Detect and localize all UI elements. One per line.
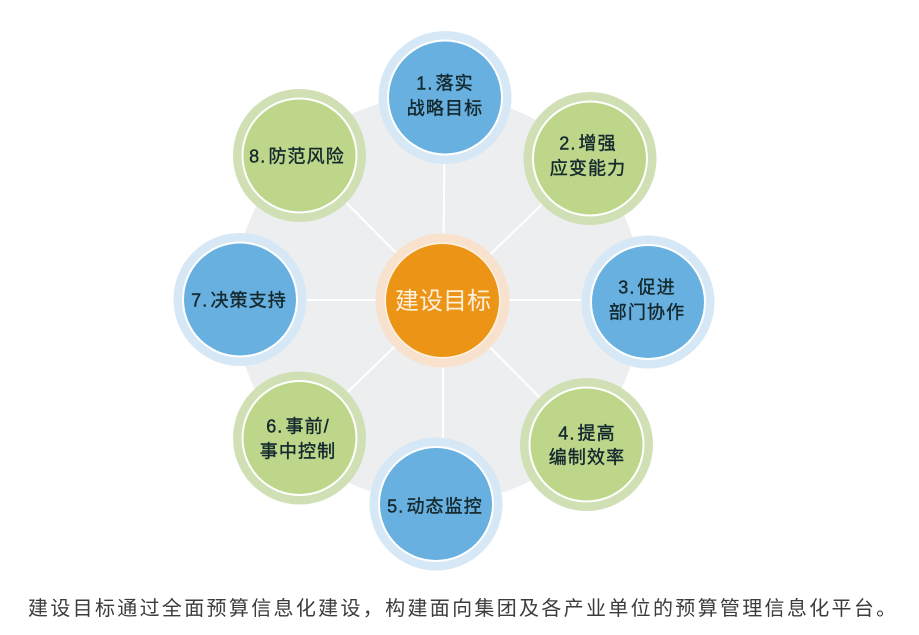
- node 1: 落实战略目标: [378, 31, 512, 164]
- node 6: 事前/事中控制: [233, 372, 366, 504]
- spokes connecting centre to nodes: [240, 97, 648, 504]
- node 1: 落实战略目标: 战略目标: [407, 98, 483, 118]
- background panel: gray disc: [234, 95, 642, 503]
- node 8: 防范风险: 8. 防范风险: [249, 146, 345, 166]
- node 7: 决策支持: 7. 决策支持: [191, 290, 287, 310]
- node 3: 促进部门协作: 部门协作: [609, 302, 685, 322]
- node 6: 事前/事中控制: 事中控制: [260, 442, 336, 462]
- node 5: 动态监控: 5. 动态监控: [387, 496, 483, 516]
- centre node: 建设目标: 建设目标: [395, 288, 491, 315]
- node 8: 防范风险: [233, 89, 366, 222]
- node 7: 决策支持: [174, 233, 306, 366]
- node 2: 增强应变能力: 应变能力: [550, 158, 626, 178]
- caption: 建设目标通过全面预算信息化建设，构建面向集团及各产业单位的预算管理信息化平台。: [28, 597, 898, 620]
- node 3: 促进部门协作: 3. 促进: [618, 278, 676, 298]
- node 4: 提高编制效率: 4. 提高: [558, 424, 616, 444]
- centre node: 建设目标: [376, 234, 510, 368]
- node 2: 增强应变能力: 2. 增强: [559, 134, 617, 154]
- node 1: 落实战略目标: 1. 落实: [416, 74, 474, 94]
- node 4: 提高编制效率: 编制效率: [549, 448, 625, 468]
- node 2: 增强应变能力: [524, 92, 656, 225]
- node 4: 提高编制效率: [520, 378, 653, 511]
- node 5: 动态监控: [370, 438, 502, 570]
- node 3: 促进部门协作: [582, 236, 714, 368]
- node 6: 事前/事中控制: 6. 事前/: [266, 416, 330, 436]
